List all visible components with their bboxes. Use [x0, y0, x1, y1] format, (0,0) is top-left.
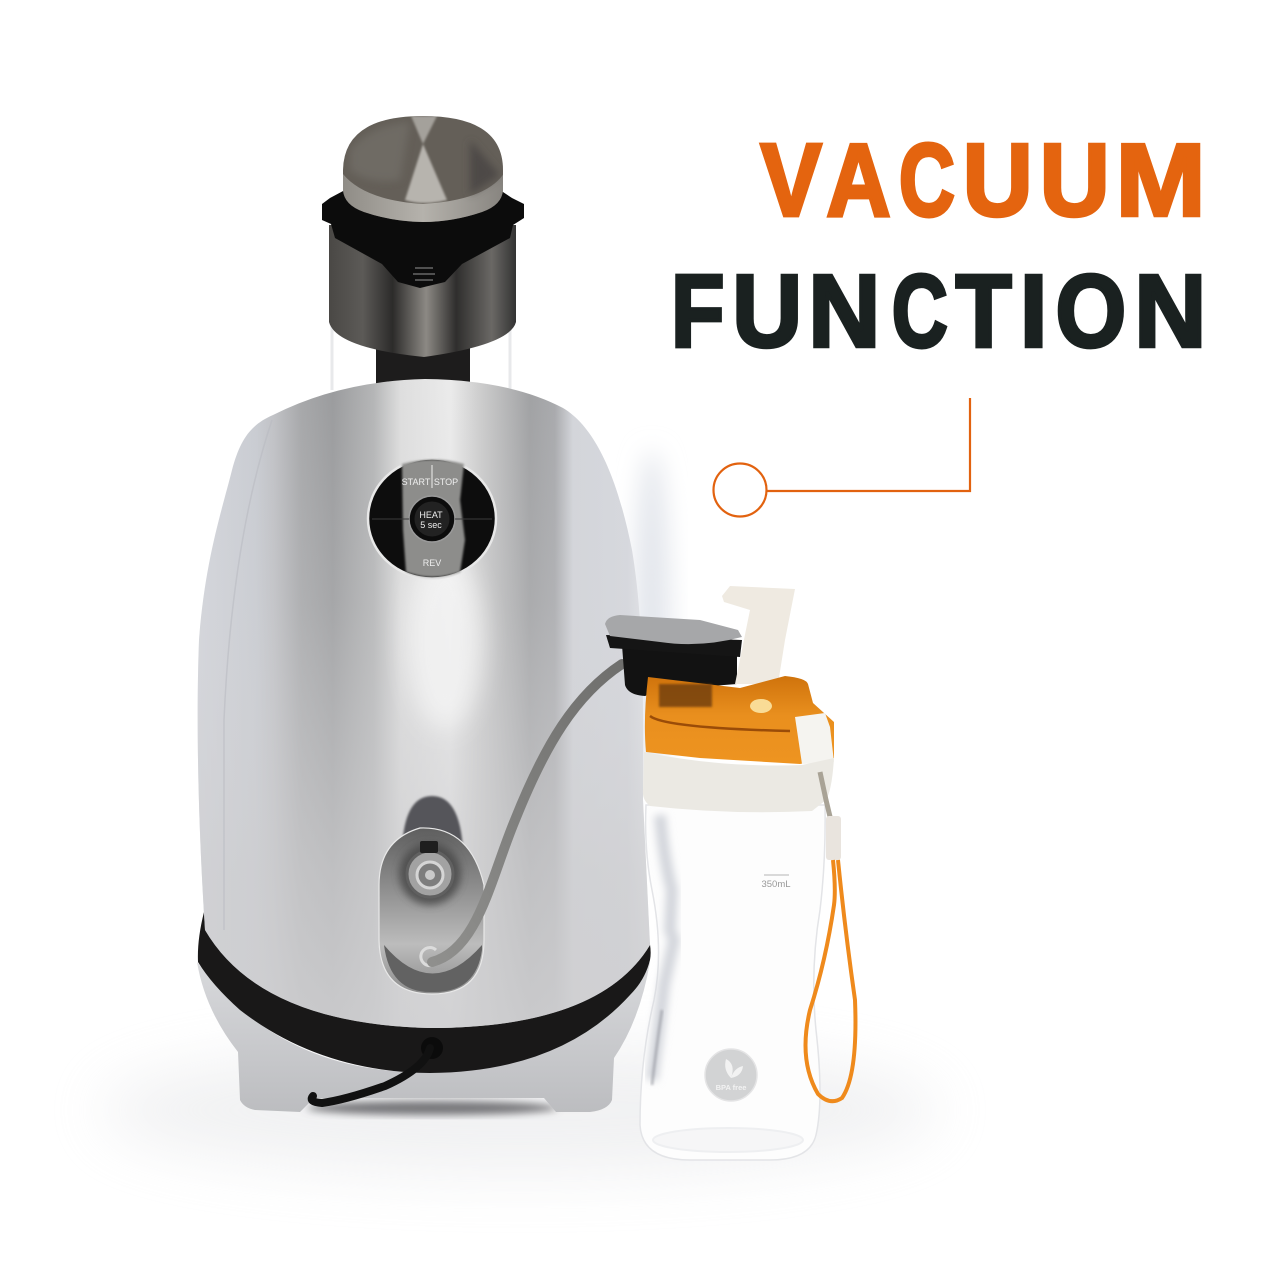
neck: [376, 345, 470, 387]
heading: VACUUM: C: [899, 124, 955, 238]
heading: VACUUM: M: [1116, 123, 1206, 238]
flip straw: [722, 586, 795, 684]
heading: FUNCTION: F: [671, 254, 724, 369]
glass chute: [332, 320, 510, 390]
lanyard: [806, 772, 855, 1101]
vacuum adapter: [605, 615, 742, 696]
main body: [190, 370, 660, 1040]
heading: FUNCTION: N: [1134, 253, 1206, 369]
callout line with circle: [714, 398, 970, 516]
juicer: [190, 112, 660, 1112]
heading: FUNCTION: N: [808, 253, 880, 369]
floor shadow: [100, 450, 940, 1175]
volume mark: 350mL: [761, 879, 791, 890]
heading: VACUUM: V: [760, 123, 822, 238]
heading: VACUUM: U: [963, 124, 1033, 238]
power cord: [312, 1037, 443, 1103]
control panel: REV: [423, 558, 441, 568]
bottle body: [640, 805, 825, 1160]
orange lid: [645, 676, 834, 764]
white latch: [795, 713, 834, 764]
dark collar: [329, 225, 516, 357]
steel cap: [343, 116, 503, 222]
BPA free badge: [705, 1049, 757, 1101]
control panel: START: [402, 477, 431, 487]
outlet recess: [379, 796, 484, 994]
heading: VACUUM: [760, 123, 1206, 238]
black band: [198, 912, 651, 1073]
body highlight: [407, 550, 483, 730]
control panel: 5 sec: [420, 520, 442, 530]
heading: FUNCTION: U: [732, 255, 802, 369]
control panel: STOP: [434, 477, 458, 487]
title: [671, 123, 1206, 369]
BPA free badge: BPA free: [716, 1083, 746, 1092]
heading: FUNCTION: [671, 253, 1206, 369]
base: [197, 962, 650, 1112]
bottle reflection: [652, 815, 674, 1080]
vacuum hose: [432, 664, 622, 962]
black lid ring: [322, 190, 524, 288]
heading: VACUUM: U: [1040, 124, 1110, 238]
heading: FUNCTION: C: [892, 255, 948, 369]
water bottle: [605, 586, 855, 1160]
heading: FUNCTION: I: [1020, 253, 1048, 369]
control panel: [368, 458, 496, 578]
heading: FUNCTION: O: [1056, 253, 1126, 369]
heading: VACUUM: A: [826, 123, 890, 238]
white collar: [643, 752, 834, 812]
control panel: HEAT: [419, 510, 443, 520]
heading: FUNCTION: T: [956, 254, 1012, 369]
